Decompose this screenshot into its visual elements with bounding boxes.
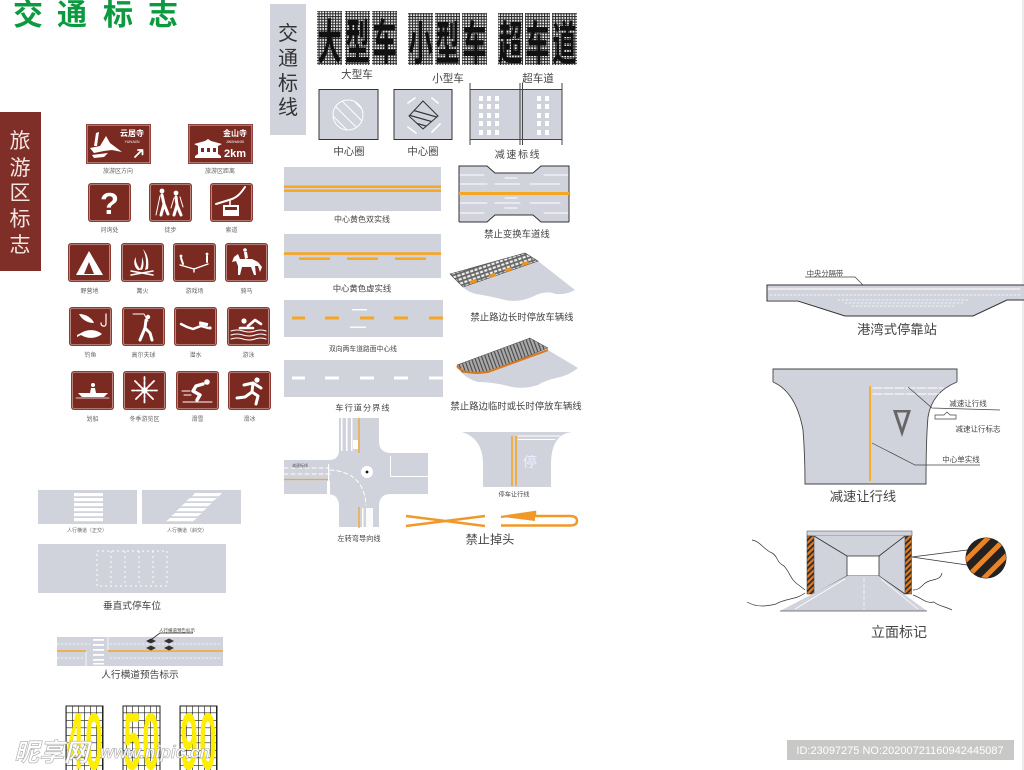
sign: playground: 游戏场 bbox=[185, 287, 204, 295]
watermark: site logo: 昵享网 bbox=[14, 739, 93, 767]
label: 人行横道（正交） bbox=[67, 527, 107, 534]
label: 中心圈 bbox=[333, 145, 365, 158]
road word marking: large vehicle: 车 bbox=[373, 17, 396, 70]
label: 减速标线 bbox=[495, 148, 541, 161]
road word marking: overtaking lane bbox=[498, 13, 577, 85]
sign: swimming bbox=[227, 307, 270, 359]
sign: scenic distance: 2km bbox=[224, 148, 246, 160]
panel: traffic markings heading: 交 bbox=[278, 22, 298, 45]
title bbox=[13, 0, 178, 32]
label: 禁止路边长时停放车辆线 bbox=[470, 312, 574, 322]
label: 人行横道预告标示 bbox=[101, 668, 179, 681]
sign: skiing bbox=[176, 371, 219, 423]
road: center yellow dashed-solid bbox=[284, 234, 441, 294]
road word marking: small vehicle: 车 bbox=[462, 17, 487, 70]
road word marking: large vehicle bbox=[317, 11, 397, 81]
sign: playground bbox=[173, 243, 216, 295]
sign: scenic distance: 金山寺 bbox=[223, 128, 247, 138]
panel: traffic markings heading: 通 bbox=[278, 47, 298, 70]
sign: boating bbox=[71, 371, 114, 423]
panel: scenic area signs heading: 志 bbox=[10, 234, 30, 257]
road word marking: small vehicle: 小 bbox=[408, 17, 433, 70]
marking: no temporary or long-term roadside parking bbox=[450, 338, 582, 412]
label: 超车道 bbox=[522, 72, 554, 85]
road: lane divider bbox=[284, 360, 443, 412]
deceleration yield diagram bbox=[773, 369, 1001, 504]
sign: hiking bbox=[149, 183, 192, 234]
road: center yellow double solid bbox=[284, 167, 441, 224]
label: 大型车 bbox=[341, 68, 373, 81]
sign: horse riding bbox=[225, 243, 268, 295]
callouts: 减速让行线 bbox=[949, 398, 987, 408]
panel: scenic area signs heading: 游 bbox=[10, 157, 30, 180]
marking: no long-term roadside parking bbox=[450, 253, 575, 322]
tunnel elevation marking diagram bbox=[747, 526, 1012, 640]
perpendicular parking bbox=[38, 544, 226, 612]
panel: traffic markings heading bbox=[270, 4, 306, 135]
callout bbox=[148, 627, 195, 642]
sign: scenic direction: 旅游区方向 bbox=[103, 167, 133, 175]
label: 中心黄色虚实线 bbox=[333, 284, 392, 294]
sign: scenic direction: YUNJUSI bbox=[125, 140, 140, 144]
panel: scenic area signs heading bbox=[0, 112, 41, 271]
sign: campfire bbox=[121, 243, 164, 295]
sign: fishing: 钓鱼 bbox=[84, 351, 97, 359]
label: 减速让行线 bbox=[830, 489, 896, 504]
road word marking: large vehicle: 大 bbox=[318, 17, 341, 70]
deceleration marking bbox=[470, 83, 562, 161]
road word marking: small vehicle: 型 bbox=[435, 17, 460, 70]
sign: campfire: 篝火 bbox=[136, 287, 149, 295]
right edge line bbox=[1022, 0, 1024, 770]
intersection diagram bbox=[284, 418, 428, 543]
sign: scenic distance bbox=[188, 124, 253, 175]
sign: skiing: 滑雪 bbox=[191, 415, 204, 423]
callout: 中央分隔带 bbox=[807, 269, 843, 278]
callout: 人行横道预告标示 bbox=[159, 627, 195, 634]
road word marking: overtaking lane: 道 bbox=[552, 17, 577, 70]
panel: scenic area signs heading: 标 bbox=[10, 208, 30, 231]
label: 双向两车道路面中心线 bbox=[329, 344, 397, 353]
sign: scenic distance: JINSHANSI bbox=[226, 140, 244, 144]
label: 小型车 bbox=[432, 72, 464, 85]
sign: horse riding: 骑马 bbox=[240, 287, 253, 295]
sign: swimming: 游泳 bbox=[242, 351, 255, 359]
sign: diving: 潜水 bbox=[189, 351, 202, 359]
no U-turn marking bbox=[406, 512, 577, 546]
speed markings grids bbox=[66, 706, 218, 770]
sign: skating: 滑冰 bbox=[243, 415, 256, 423]
crosswalk: diagonal bbox=[142, 490, 241, 534]
sign: camping: 野营地 bbox=[80, 287, 99, 295]
road word marking: small vehicle bbox=[408, 13, 487, 85]
label: 禁止路边临时或长时停放车辆线 bbox=[450, 400, 582, 412]
road word marking: overtaking lane: 超 bbox=[498, 17, 523, 70]
label: 左转弯导向线 bbox=[337, 534, 381, 543]
label: 立面标记 bbox=[871, 624, 927, 640]
sign: golf bbox=[122, 307, 165, 359]
road: two-way center line bbox=[284, 300, 443, 353]
icon: hazard stripes detail with arrow bbox=[912, 538, 1006, 578]
sign: information: 问询处 bbox=[100, 226, 119, 234]
label: 港湾式停靠站 bbox=[857, 321, 937, 337]
road word marking: overtaking lane: 车 bbox=[525, 17, 550, 70]
panel: scenic area signs heading: 区 bbox=[10, 182, 30, 205]
center circle marking bbox=[319, 89, 378, 158]
sign: hiking: 徒步 bbox=[164, 226, 177, 234]
watermark: image id: ID:23097275 NO:20200721160942445087 bbox=[796, 745, 1004, 757]
sign: winter sports area bbox=[123, 371, 166, 423]
panel: traffic markings heading: 标 bbox=[278, 72, 298, 95]
callout bbox=[805, 269, 863, 285]
harbor-style bus stop diagram bbox=[767, 269, 1024, 337]
stop-and-yield diagram bbox=[462, 432, 572, 498]
center diamond marking bbox=[394, 89, 452, 158]
sign: scenic direction: 云居寺 bbox=[120, 129, 144, 138]
sign: information: ? bbox=[100, 186, 119, 221]
sign: winter sports area: 冬季游览区 bbox=[129, 415, 160, 423]
sign: camping bbox=[68, 243, 111, 295]
callouts bbox=[872, 387, 1001, 465]
callouts: 减速让行标志 bbox=[956, 424, 1001, 434]
intersection diagram: 减速标线 bbox=[292, 462, 308, 468]
sign: scenic direction bbox=[86, 124, 151, 175]
panel: scenic area signs heading: 旅 bbox=[10, 130, 30, 153]
road word marking: large vehicle: 型 bbox=[346, 17, 369, 70]
sign: golf: 高尔夫球 bbox=[131, 351, 156, 359]
sign: scenic distance: 旅游区距离 bbox=[205, 167, 235, 175]
sign: diving bbox=[174, 307, 217, 359]
watermark: site logo bbox=[14, 739, 210, 767]
label: 停车让行线 bbox=[499, 490, 529, 498]
label: 中心圈 bbox=[407, 145, 439, 158]
panel: scenic area signs bbox=[68, 124, 271, 423]
sign: skating bbox=[228, 371, 271, 423]
label: 中心黄色双实线 bbox=[334, 214, 390, 224]
stop-and-yield diagram: 停 bbox=[523, 454, 537, 470]
watermark: site logo: www.nipic.cn bbox=[100, 742, 210, 762]
label: 禁止变换车道线 bbox=[484, 228, 550, 240]
label: 车行道分界线 bbox=[335, 402, 391, 412]
callouts: 中心单实线 bbox=[942, 454, 980, 464]
sign: information bbox=[88, 183, 131, 234]
road: no lane change bbox=[459, 166, 569, 240]
sign: boating: 划船 bbox=[86, 415, 99, 423]
panel: traffic markings heading: 线 bbox=[278, 96, 298, 119]
label: 垂直式停车位 bbox=[103, 599, 161, 612]
label: 禁止掉头 bbox=[466, 532, 514, 546]
sign: fishing bbox=[69, 307, 112, 359]
watermark: image id bbox=[787, 740, 1014, 760]
crosswalk: perpendicular bbox=[38, 490, 137, 534]
crosswalk advance notice bbox=[57, 627, 223, 681]
label: 人行横道（斜交） bbox=[167, 527, 207, 534]
sign: cable car bbox=[210, 183, 253, 234]
sign: cable car: 索道 bbox=[225, 226, 238, 234]
